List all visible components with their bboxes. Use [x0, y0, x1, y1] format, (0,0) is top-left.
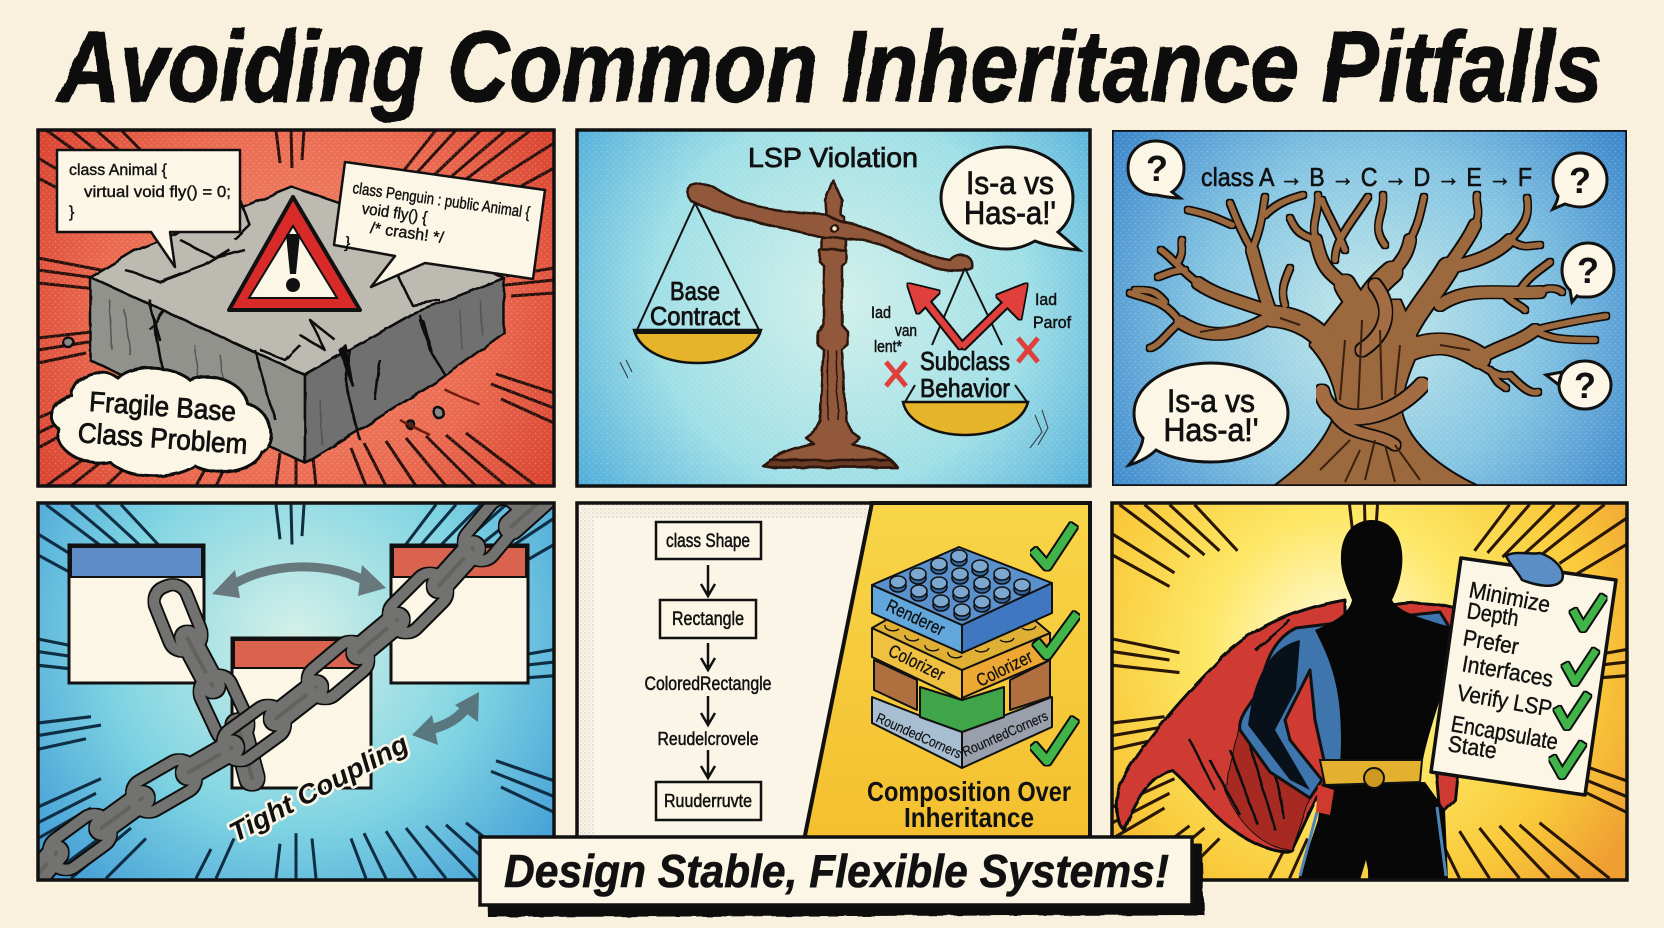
cloud label: Fragile Base — [88, 386, 237, 427]
inheritance flow — [644, 522, 772, 820]
question bubble 2 — [1553, 153, 1607, 209]
code bubble: Penguin: void fly() { — [361, 201, 429, 227]
panel background — [38, 503, 554, 880]
left arm shading — [1248, 640, 1310, 790]
renderer stud bases — [890, 554, 1030, 620]
twisted tree — [1112, 130, 1627, 490]
speech bubble: Is-a vs Has-a: Has-a!' — [964, 195, 1056, 231]
cloud label: Class Problem — [77, 417, 249, 460]
label: Reudelcrovele: Reudelcrovele — [658, 729, 758, 749]
arrow 3 — [701, 696, 715, 725]
speech bubble: Is-a vs Has-a — [941, 147, 1079, 250]
panel: fragile base class — [38, 130, 554, 486]
question bubble 1: ? — [1146, 148, 1168, 189]
right pan: Behavior — [920, 373, 1010, 403]
check marks — [1033, 525, 1077, 761]
checklist items: Verify LSP — [1455, 679, 1554, 722]
panel background — [577, 130, 1090, 486]
code bubble: Animal: class Animal { — [69, 162, 168, 179]
caption: composition over inheritance — [867, 776, 1071, 833]
lego stack — [872, 547, 1052, 768]
panel: tight coupling — [36, 501, 556, 882]
checklist items: Minimize — [1467, 576, 1553, 618]
label: ColoredRectangle: ColoredRectangle — [644, 674, 772, 695]
checklist items: Encapsulate — [1449, 710, 1560, 755]
warning triangle — [229, 197, 360, 310]
panel: composition over inheritance — [577, 503, 1090, 880]
question bubble 4 — [1546, 361, 1611, 409]
code bubble: Animal: } — [69, 204, 75, 221]
question bubble 1 — [1128, 141, 1184, 198]
checklist items: Prefer — [1461, 624, 1521, 660]
class window left — [69, 545, 204, 683]
box: Ruuderruvte: Ruuderruvte — [664, 791, 752, 811]
code bubble: Animal — [57, 150, 240, 267]
box: class Shape: class Shape — [666, 531, 750, 552]
glove — [1316, 785, 1334, 815]
leg highlights — [1300, 807, 1446, 876]
panel border — [38, 130, 554, 486]
chains — [40, 504, 552, 878]
code bubble: Penguin: } — [344, 235, 352, 252]
box: Rectangle — [660, 600, 756, 638]
middle coloured layer — [874, 660, 1050, 732]
small labels: van — [895, 321, 917, 340]
small labels: Iad — [871, 303, 891, 322]
speech bubble: Is-a vs Has-a: Has-a!' — [1164, 412, 1258, 448]
renderer brick: Renderer — [883, 595, 948, 640]
cape — [1117, 600, 1464, 852]
question bubble 4: ? — [1574, 365, 1596, 406]
panel border — [577, 130, 1090, 486]
caption: composition over inheritance: Composition Over — [867, 776, 1071, 807]
panel background — [1112, 503, 1627, 880]
panel border — [1112, 503, 1627, 880]
bark strokes — [1200, 318, 1470, 482]
colorizer brick: Colorizer — [885, 640, 948, 685]
trunk twist — [1322, 285, 1422, 445]
speech bubble: Is-a vs Has-a: Is-a vs — [966, 165, 1054, 201]
left pan: Base — [670, 276, 720, 306]
small labels — [871, 290, 1071, 356]
Tight Coupling label: Tight Coupling — [224, 728, 414, 848]
class window right — [391, 545, 528, 683]
caption: composition over inheritance: Inheritance — [904, 802, 1034, 833]
hand — [1506, 553, 1563, 586]
cloud label — [51, 368, 271, 476]
checklist paper — [1431, 553, 1616, 795]
red cross marks — [886, 338, 1038, 386]
panel border — [38, 503, 554, 880]
code bubble: Animal: virtual void fly() = 0; — [84, 184, 231, 201]
heading: LSP Violation: LSP Violation — [748, 142, 918, 173]
renderer brick — [872, 547, 1052, 653]
hero — [1117, 520, 1464, 880]
bottom brick — [872, 697, 1052, 768]
small labels: Iad — [1035, 290, 1057, 309]
left pan — [620, 203, 761, 378]
coupling arrow top — [212, 565, 386, 598]
code bubble: Penguin: /* crash! */ — [369, 220, 445, 247]
right pan: Subclass — [920, 346, 1010, 376]
right pan — [903, 268, 1048, 448]
cracked stone block — [64, 187, 504, 463]
question bubble 3 — [1562, 243, 1614, 302]
scale stand — [687, 180, 972, 467]
arrow 4 — [701, 750, 715, 778]
bottom brick: RoundedCorners — [874, 709, 964, 761]
question bubble 2: ? — [1569, 160, 1591, 201]
closing banner — [480, 837, 1204, 917]
arrow 1 — [701, 565, 715, 596]
red arrows — [909, 285, 1026, 347]
belt — [1320, 760, 1422, 788]
panel border — [577, 503, 1090, 880]
colorizer brick: Colorizer — [973, 646, 1036, 691]
checklist items: Depth — [1465, 597, 1521, 631]
checklist ticks — [1552, 596, 1604, 775]
coupling arrow bottom — [412, 692, 479, 745]
speech bubble: Is-a vs Has-a: Is-a vs — [1167, 383, 1255, 419]
box: class Shape — [656, 522, 761, 559]
left half background — [577, 503, 872, 880]
chain crossing — [150, 580, 261, 787]
renderer studs — [890, 550, 1030, 616]
panel border — [1112, 130, 1627, 486]
bottom brick: RounrtedCorners — [960, 707, 1050, 759]
question bubble 3: ? — [1577, 250, 1599, 291]
speech bubble: Is-a vs Has-a — [1129, 363, 1288, 465]
panel: superhero checklist — [1112, 503, 1627, 880]
small labels: lent* — [874, 337, 902, 356]
panel background — [1112, 130, 1627, 486]
checklist items — [1446, 576, 1560, 764]
left pan: Contract — [650, 301, 741, 331]
closing banner: Design Stable, Flexible Systems! — [504, 845, 1169, 897]
arrow 2 — [701, 643, 715, 670]
checklist items: Interfaces — [1460, 650, 1555, 692]
box: Rectangle: Rectangle — [672, 609, 744, 630]
balance scale — [620, 180, 1048, 467]
class chain label: class A → B → C → D → E → F — [1201, 162, 1532, 192]
class window centre — [232, 638, 371, 788]
checklist items: State — [1446, 730, 1499, 764]
panel: LSP violation — [577, 130, 1090, 486]
silhouette — [1315, 520, 1462, 765]
colorizer brick — [872, 612, 1050, 700]
code bubble: Penguin: class Penguin : public Animal { — [351, 180, 532, 222]
right half background — [796, 503, 1090, 880]
arms and torso — [1240, 612, 1448, 798]
small labels: Parof — [1033, 313, 1071, 332]
code bubble: Penguin — [334, 162, 545, 287]
chain diagonal — [40, 504, 552, 878]
legs — [1298, 782, 1448, 880]
box: Ruuderruvte — [656, 782, 761, 820]
panel background — [38, 130, 554, 486]
